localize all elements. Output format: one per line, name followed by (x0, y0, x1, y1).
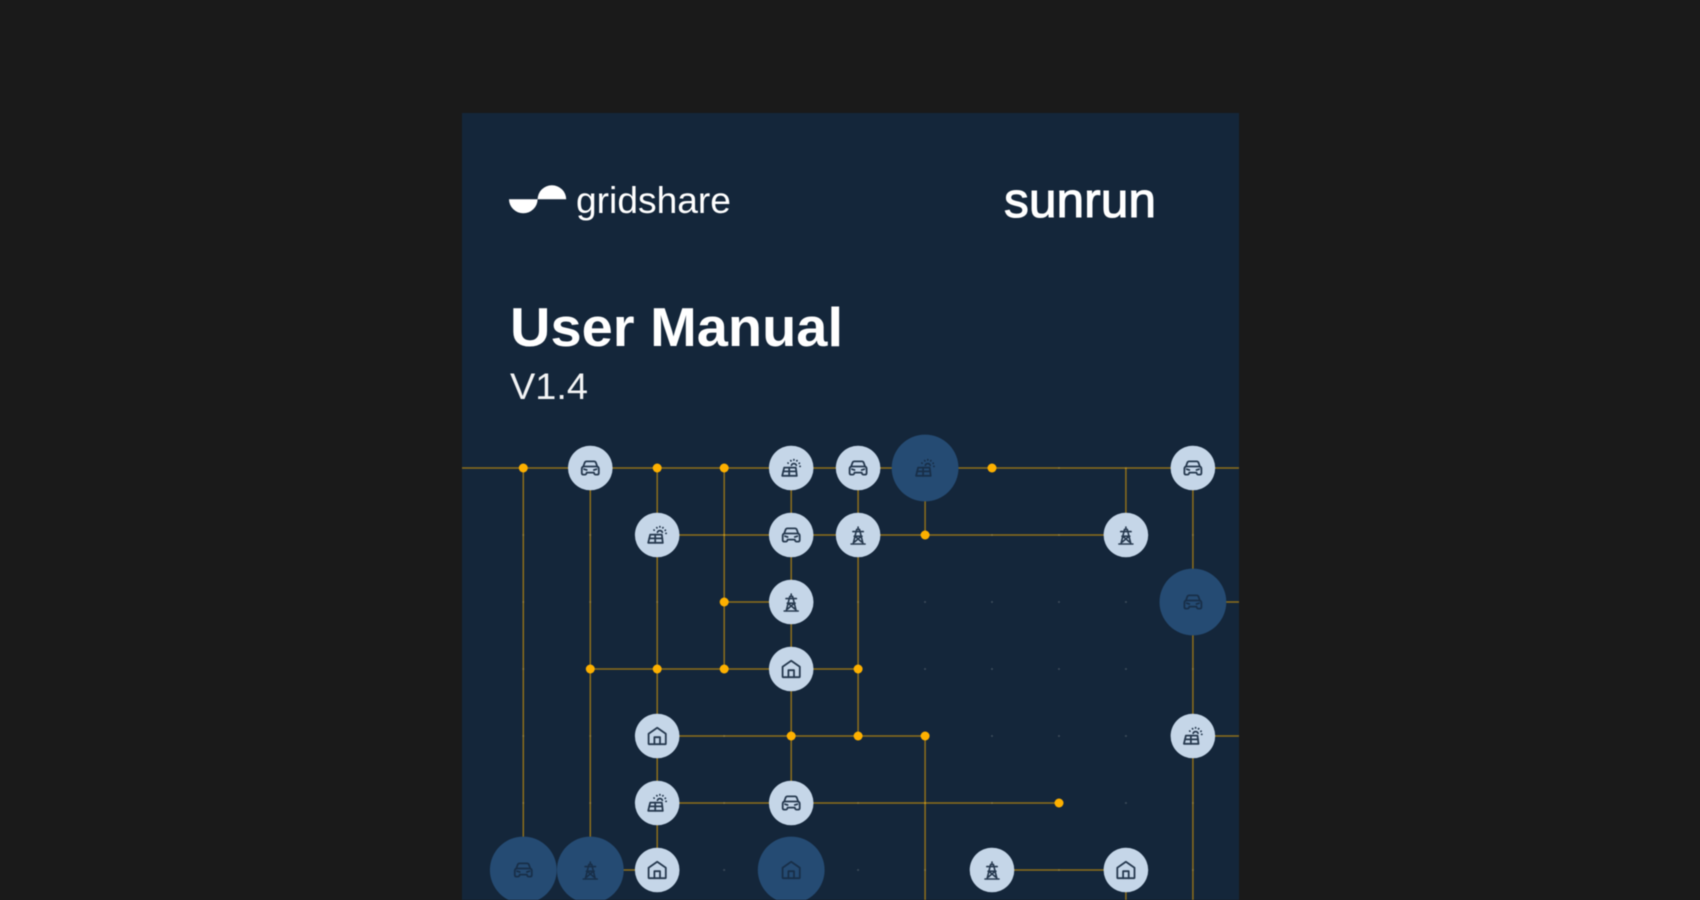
node: solar highlighted (892, 435, 958, 501)
node: tower (836, 513, 880, 557)
node: house (769, 647, 814, 691)
node: solar (635, 781, 680, 825)
version label: V1.4 (510, 366, 588, 407)
logo: gridshare (509, 180, 731, 221)
icon: gridshare wave mark (509, 185, 566, 213)
node: house (635, 848, 680, 892)
node: house highlighted (758, 837, 825, 900)
connector lines (462, 468, 1239, 900)
node: tower (970, 848, 1014, 892)
node: car (1171, 446, 1215, 490)
node: solar (769, 446, 814, 490)
junction dots (519, 464, 1064, 808)
node: house (1104, 848, 1148, 892)
node: solar (1171, 714, 1215, 758)
node: tower (1104, 513, 1148, 557)
node: car (836, 446, 880, 490)
logo: sunrun: sunrun (1004, 174, 1156, 228)
node: house (635, 714, 680, 758)
node: solar (635, 513, 680, 557)
title: User Manual (510, 296, 843, 358)
node: car (769, 781, 814, 825)
node: car highlighted (490, 837, 557, 900)
node: tower (769, 580, 814, 624)
node: car (568, 446, 613, 490)
wordmark: gridshare: gridshare (576, 180, 731, 221)
node: car (769, 513, 814, 557)
network diagram (462, 434, 1239, 900)
panel: manual cover (462, 113, 1239, 900)
node: tower highlighted (557, 837, 624, 900)
node: car highlighted (1160, 569, 1226, 635)
